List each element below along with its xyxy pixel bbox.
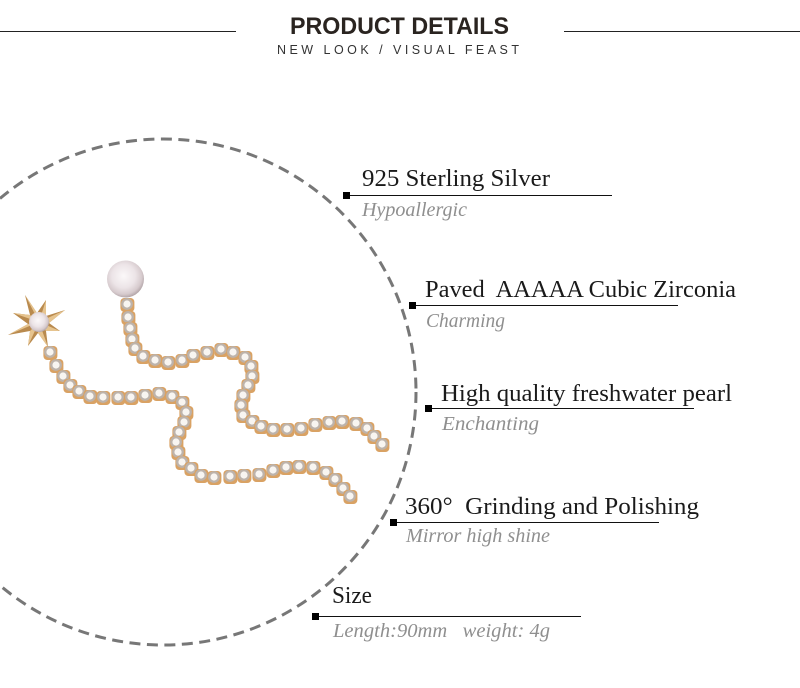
callout: 360 Grinding and Polishing: Mirror high shine [405, 525, 550, 547]
callout: 360 Grinding and Polishing: 360° Grinding and Polishing [405, 494, 699, 520]
callout: 925 Sterling Silver: 925 Sterling Silver [362, 166, 550, 192]
callout: High quality freshwater pearl [425, 381, 732, 435]
header [0, 13, 800, 57]
callout: 360 Grinding and Polishing [390, 494, 699, 547]
callout: Paved AAAAA Cubic Zirconia [409, 277, 736, 332]
icon: gold star with pearl [8, 295, 65, 347]
callout: 925 Sterling Silver [343, 166, 612, 221]
title: PRODUCT DETAILS [290, 13, 509, 40]
callout: Paved AAAAA Cubic Zirconia: Paved AAAAA Cubic Zirconia [425, 277, 736, 303]
callout: Paved AAAAA Cubic Zirconia: Charming [426, 310, 505, 332]
callout: High quality freshwater pearl: High quality freshwater pearl [441, 381, 732, 407]
earring chain: left [43, 346, 357, 504]
callout: Size: Length:90mm weight: 4g [332, 620, 550, 642]
callout: Size [312, 583, 581, 642]
callout: 925 Sterling Silver: Hypoallergic [361, 199, 467, 221]
callout: Size: Size [332, 583, 372, 609]
earring chain: right [120, 298, 389, 452]
callout: High quality freshwater pearl: Enchanting [441, 413, 539, 435]
subtitle: NEW LOOK / VISUAL FEAST [277, 43, 519, 57]
dashed circle [0, 139, 416, 645]
icon: large pearl [107, 260, 144, 298]
